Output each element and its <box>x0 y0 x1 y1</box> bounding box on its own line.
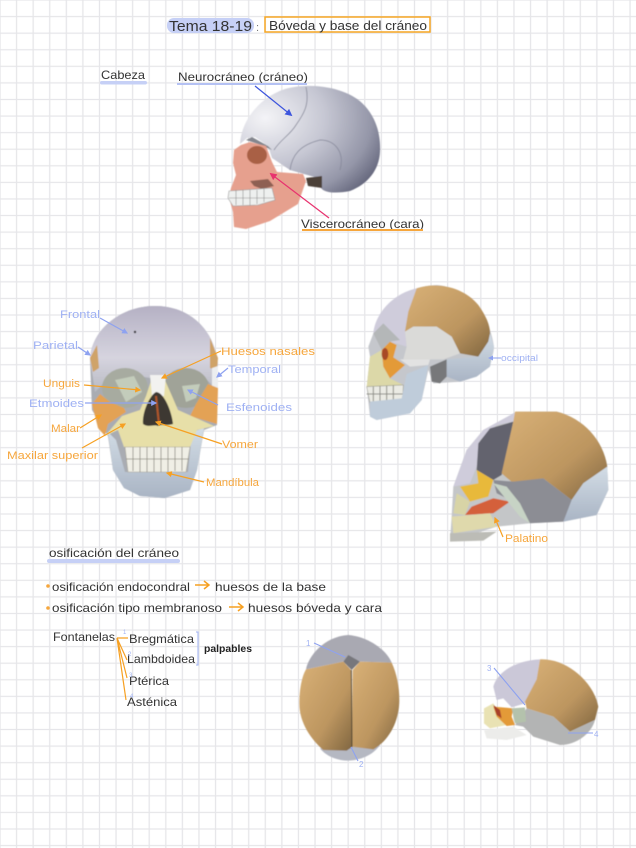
label: Parietal <box>33 340 90 355</box>
bullet: endochondral ossification: huesos de la base <box>215 580 326 594</box>
fontanelles list: Ptérica <box>129 674 169 688</box>
label: Temporal: Temporal <box>228 364 281 376</box>
bullet: membranous ossification: osificación tipo membranoso <box>52 601 222 615</box>
title: : <box>256 22 259 34</box>
pointer 3 <box>487 664 525 705</box>
label: Parietal: Parietal <box>33 340 78 352</box>
label: Unguis: Unguis <box>43 378 81 390</box>
label: Malar <box>51 415 101 435</box>
illustration: frontal skull <box>90 306 218 498</box>
label: Malar: Malar <box>51 423 80 435</box>
label: Palatino <box>495 518 548 545</box>
fontanelles list: palpables <box>204 644 252 655</box>
bullet: membranous ossification: huesos bóveda y cara <box>248 601 382 615</box>
label: Vomer: Vomer <box>222 439 258 451</box>
label: Mandíbula: Mandíbula <box>206 477 260 489</box>
pointer 3: 3 <box>487 664 492 673</box>
bullet: endochondral ossification <box>46 580 326 594</box>
fontanelles list: Bregmática <box>129 632 194 646</box>
fontanelles list: Lambdoidea <box>127 652 195 666</box>
pointer 1: 1 <box>306 639 311 648</box>
label: occipital <box>489 353 538 363</box>
label: Neurocráneo: Neurocráneo (cráneo) <box>178 70 308 84</box>
illustration: lateral skull <box>228 86 380 229</box>
label: Vomer <box>156 422 258 451</box>
label: Huesos nasales: Huesos nasales <box>221 346 316 358</box>
fontanelles list: 2 <box>128 652 132 658</box>
illustration: infant skull, side view <box>484 659 598 745</box>
label: Mandíbula <box>167 473 260 489</box>
label: Maxilar superior: Maxilar superior <box>7 450 98 462</box>
fontanelles list: 4 <box>130 694 134 700</box>
frontal skull labels <box>7 309 316 489</box>
title <box>167 17 430 35</box>
label: Maxilar superior <box>7 424 125 462</box>
label: occipital: occipital <box>501 353 538 363</box>
bullet: membranous ossification <box>46 601 382 615</box>
title: Tema 18-19 <box>169 18 252 35</box>
pointer 4 <box>568 730 599 739</box>
label: Frontal: Frontal <box>60 309 100 321</box>
fontanelles list: Asténica <box>127 695 177 709</box>
label: Palatino: Palatino <box>505 533 548 545</box>
arrow: viscerocranium <box>271 174 329 218</box>
pointer 1 <box>306 639 345 657</box>
label: Frontal <box>60 309 127 333</box>
label: Esfenoides: Esfenoides <box>226 402 293 414</box>
pointer 2 <box>351 747 364 769</box>
pointer 4: 4 <box>594 730 599 739</box>
fontanelles list: 1 <box>123 630 127 636</box>
label: Unguis <box>43 378 140 390</box>
heading: Cabeza: Cabeza <box>101 68 145 82</box>
title: Bóveda y base del cráneo <box>269 18 427 33</box>
heading: osificación del cráneo: osificación del cráneo <box>49 546 179 560</box>
label: Viscerocráneo: Viscerocráneo (cara) <box>301 217 424 231</box>
label: Temporal <box>217 364 281 377</box>
label: Etmoides: Etmoides <box>29 398 85 410</box>
label: Huesos nasales <box>162 346 316 378</box>
arrow: neurocranium <box>255 86 291 115</box>
fontanelle pointers and numbers <box>306 639 599 769</box>
fontanelles list: Fontanelas <box>53 630 115 644</box>
illustration: infant skull, top view <box>299 635 399 761</box>
illustration: lateral skull with coloured bones <box>367 285 494 420</box>
fontanelles list: 3 <box>129 673 133 679</box>
label: Esfenoides <box>188 390 293 414</box>
illustration: sagittal skull section <box>450 412 608 542</box>
pointer 2: 2 <box>359 760 364 769</box>
label: Etmoides <box>29 398 156 410</box>
fontanelles list <box>53 630 252 709</box>
bullet: endochondral ossification: osificación endocondral <box>52 580 190 594</box>
